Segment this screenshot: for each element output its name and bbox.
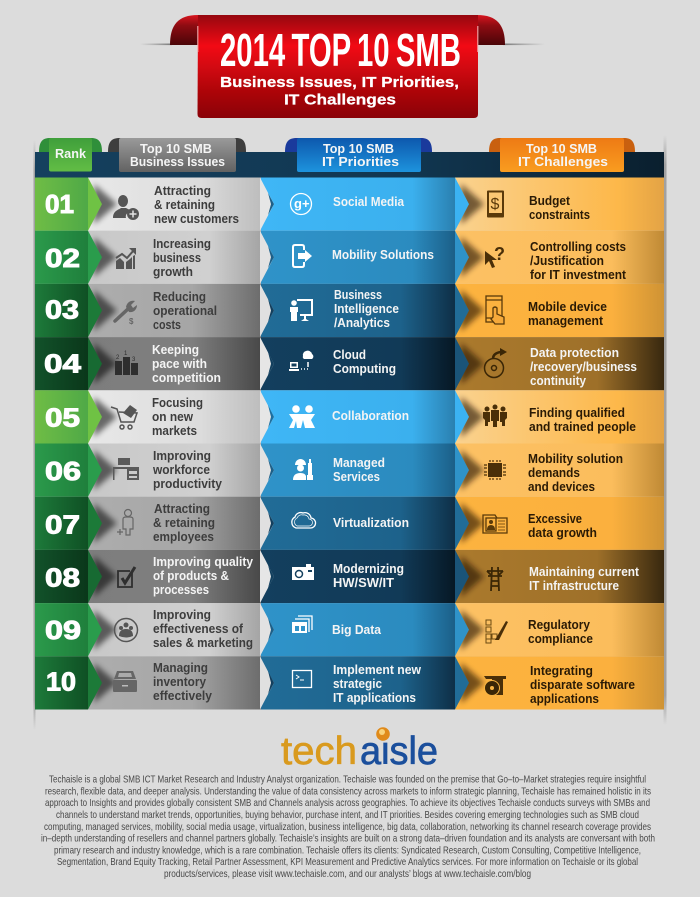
footer description: products/services, please visit www.techaisle.com, and our analysts’ blogs at www.techaisle.com/blog [164, 868, 531, 880]
icon: google plus [290, 194, 312, 214]
icon: dollar tablet: $ [490, 196, 500, 213]
IT priorities text: Cloud [333, 348, 366, 362]
rank numbers: 08 [45, 562, 80, 592]
panel: rank column [35, 178, 102, 710]
IT challenges text: Data protection [530, 346, 619, 360]
icon: two people [289, 405, 315, 428]
icon: chip [484, 460, 506, 480]
icon: inventory drawer [113, 671, 137, 692]
IT challenges text: /recovery/business [530, 360, 637, 374]
IT challenges text: applications [530, 692, 599, 706]
business issues text: on new [152, 410, 193, 424]
panel: IT challenges column [455, 178, 664, 710]
table side shadows [34, 135, 666, 730]
business issues text: Reducing [153, 290, 206, 304]
IT priorities text [332, 195, 434, 705]
IT challenges text: Maintaining current [529, 565, 640, 579]
icon: id folder [483, 515, 507, 533]
tab: Top 10 SMB Business Issues [108, 138, 246, 172]
business issues text: employees [153, 530, 214, 544]
IT priorities text: IT applications [333, 691, 416, 705]
IT priorities text: Collaboration [332, 409, 409, 423]
IT challenges text: disparate software [530, 678, 635, 692]
icon: office desk [113, 458, 139, 480]
business issues text: operational [153, 304, 217, 318]
icon: podium [115, 351, 138, 375]
panel: business issues column [88, 178, 274, 710]
icon: camera box [292, 564, 314, 580]
tab: Top 10 SMB Business Issues: Business Issues [130, 155, 225, 169]
logo: tech [281, 730, 357, 773]
rank numbers: 01 [45, 189, 74, 219]
IT challenges text: continuity [530, 374, 586, 388]
IT priorities text: Mobility Solutions [332, 248, 434, 262]
rank numbers: 10 [46, 666, 76, 696]
business issues text: Attracting [154, 502, 210, 516]
business issues text: growth [153, 265, 193, 279]
icon: worker with wrench [293, 459, 313, 480]
icon: phone with arrow [293, 245, 312, 267]
tab: Top 10 SMB IT Challenges [489, 138, 635, 172]
tab: Rank: Rank [55, 147, 86, 161]
icon: cloud outline [292, 513, 316, 528]
IT priorities text: HW/SW/IT [333, 576, 394, 590]
IT priorities text: /Analytics [334, 316, 390, 330]
icon: wrench and dollar [115, 301, 137, 326]
subtitle: IT Challenges [284, 92, 396, 108]
icon: team circle [114, 618, 138, 642]
business issues text: markets [152, 424, 197, 438]
IT priorities text: Computing [333, 362, 396, 376]
business issues text: Attracting [154, 184, 211, 198]
tab: Top 10 SMB IT Priorities: Top 10 SMB [323, 142, 394, 156]
icon: cursor and question mark [485, 244, 505, 268]
icon: podium: 3 [132, 357, 136, 363]
icon: power pylon [487, 567, 503, 591]
IT challenges text: compliance [528, 632, 593, 646]
footer description [41, 774, 655, 880]
business issues text: Increasing [153, 237, 211, 251]
business issues text: business [153, 251, 201, 265]
logo [281, 727, 438, 773]
business issues text: new customers [154, 212, 239, 226]
IT challenges text: constraints [529, 208, 590, 222]
subtitle: Business Issues, IT Priorities, [220, 74, 459, 91]
business issues text: competition [152, 371, 221, 385]
icon: dollar tablet [487, 190, 504, 218]
business issues text: & retaining [154, 198, 215, 212]
icon: checklist and pen [486, 620, 508, 643]
IT priorities text: Implement new [333, 663, 421, 677]
icon: terminal [292, 670, 312, 688]
icon: google plus: g+ [294, 196, 310, 211]
IT priorities text: strategic [333, 677, 382, 691]
IT priorities text: Big Data [332, 623, 382, 637]
business issues text [152, 184, 253, 703]
rank numbers: 02 [45, 243, 80, 273]
business issues text: inventory [153, 675, 206, 689]
IT challenges text: Mobile device [528, 300, 607, 314]
tab: Top 10 SMB Business Issues: Top 10 SMB [140, 142, 212, 156]
tab: Top 10 SMB IT Challenges: IT Challenges [518, 155, 608, 169]
IT priorities text: Modernizing [333, 562, 404, 576]
IT challenges text: Budget [529, 194, 571, 208]
IT priorities text: Social Media [333, 195, 405, 209]
header band [35, 152, 664, 178]
icon: podium: 2 [116, 355, 120, 361]
IT priorities text: Virtualization [333, 516, 409, 530]
IT challenges text [528, 194, 640, 706]
business issues text: costs [153, 318, 181, 332]
icon: cloud computing [289, 351, 313, 371]
IT challenges text: IT infrastructure [529, 579, 619, 593]
business issues text: workforce [152, 463, 210, 477]
IT challenges text: for IT investment [530, 268, 627, 282]
IT priorities text: Intelligence [334, 302, 399, 316]
IT challenges text: demands [528, 466, 580, 480]
icon: shopping cart [111, 405, 137, 429]
IT challenges text: Integrating [530, 664, 593, 678]
rank numbers: 07 [45, 510, 80, 540]
business issues text: Focusing [152, 396, 203, 410]
IT challenges text: and devices [528, 480, 595, 494]
business issues text: of products & [153, 569, 229, 583]
icon: growth chart [116, 248, 136, 269]
icon: disc with arrow [484, 348, 507, 378]
IT challenges text: Mobility solution [528, 452, 623, 466]
rank numbers: 03 [45, 294, 79, 324]
IT challenges text: data growth [528, 526, 597, 540]
icon: podium: 1 [124, 351, 128, 357]
business issues text: Improving [153, 449, 211, 463]
icon: presenter at board [290, 299, 313, 321]
business issues text: sales & marketing [153, 636, 253, 650]
rank numbers: 04 [44, 348, 82, 378]
icon: employee outline [117, 510, 133, 535]
tab: Top 10 SMB IT Priorities: IT Priorities [322, 155, 399, 169]
IT priorities text: Services [333, 470, 380, 484]
IT priorities text: Business [334, 288, 382, 302]
logo: aisle [360, 730, 438, 773]
icon: cursor and question mark: ? [494, 244, 505, 264]
business issues text: Managing [153, 661, 208, 675]
icon: wrench and dollar: $ [129, 317, 134, 326]
tab: Rank [39, 138, 102, 172]
IT challenges text: management [528, 314, 604, 328]
main title: 2014 TOP 10 SMB [220, 24, 461, 76]
business issues text: productivity [153, 477, 222, 491]
IT challenges text: Excessive [528, 512, 582, 526]
rank numbers [44, 189, 82, 696]
IT challenges text: /Justification [530, 254, 604, 268]
icon: phone with hand [486, 296, 504, 324]
rank numbers: 09 [45, 615, 81, 645]
rank numbers: 06 [45, 456, 81, 486]
icon: stacked cards [292, 616, 312, 633]
business issues text: Improving quality [153, 555, 253, 569]
panel: IT priorities column [261, 178, 469, 710]
icon: disc and software box [484, 676, 506, 696]
business issues text: & retaining [153, 516, 215, 530]
tab: Top 10 SMB IT Challenges: Top 10 SMB [526, 142, 597, 156]
icon: person with plus [113, 195, 139, 220]
title ribbon [140, 15, 545, 118]
IT challenges text: Regulatory [528, 618, 590, 632]
IT challenges text: Finding qualified [529, 406, 625, 420]
business issues text: Keeping [152, 343, 199, 357]
IT challenges text: and trained people [529, 420, 636, 434]
rank numbers: 05 [45, 402, 80, 432]
IT priorities text: Managed [333, 456, 385, 470]
subtitle [220, 74, 459, 108]
icon: checkbox with pen [118, 567, 135, 587]
IT challenges text: Controlling costs [530, 240, 626, 254]
business issues text: Improving [153, 608, 211, 622]
tab: Top 10 SMB IT Priorities [285, 138, 432, 172]
business issues text: pace with [152, 357, 207, 371]
icon: three people [483, 404, 507, 427]
business issues text: effectively [153, 689, 212, 703]
business issues text: effectiveness of [153, 622, 244, 636]
business issues text: processes [153, 583, 209, 597]
